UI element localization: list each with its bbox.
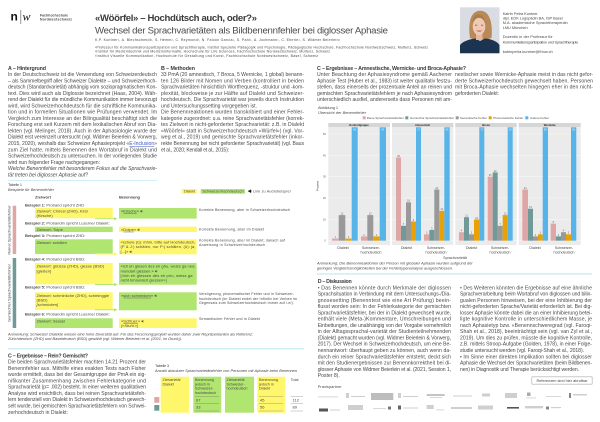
panel D: Diskussion: Sprachverarbeitung beim Wortabruf von diglossen und bilin-	[460, 292, 592, 298]
bar value labels: 10	[475, 217, 479, 220]
panel D: Diskussion: Sprachvarietätsfehler, bei der in Dialekt gewechselt wurde,	[318, 310, 451, 316]
portrait photo	[460, 7, 500, 53]
panel A: Hintergrund: tät treten bei diglosser Aphasie auf?	[8, 172, 88, 178]
panel B: Methoden: rekte Benennung bei nicht geforderter Sprachvarietät) (vgl. Baus	[161, 141, 304, 147]
bar value labels: 4	[461, 230, 463, 233]
presenter contact text: Kommunikationspartizipation und Sprachtherapie	[503, 40, 578, 44]
logo: FHNW	[10, 10, 72, 24]
table legend	[182, 189, 291, 194]
table 3: counts of variety errors: hochdeutsch	[195, 391, 216, 395]
authors and affiliations: ³Institut Visuelle Kommunikation, Hochschule für Gestaltung und Kunst, Fachhochschule Nordwestschweiz, Basel, Schweiz	[95, 54, 318, 58]
panel C top: Amnestische, Wernicke- und Broca-Aphasie	[317, 66, 593, 103]
table legend: Link zu Audiobeispiel	[253, 190, 291, 194]
table 1 note: Zürichdeutsch (ZHD) und Baseldeutsch (BSD) gewählt (vgl. Widmer Beierlein et al. (2021, im Druck)).	[7, 336, 182, 341]
bar value labels: 86	[353, 128, 357, 132]
example 5: Beispiel 5: Proband spricht BSD:	[25, 285, 85, 290]
x axis: Dialekt	[401, 246, 412, 250]
x axis: Schweizer-	[362, 246, 381, 250]
panel D: Diskussion: Einbettungen, die unabhängig von der Vorgabe vornehmlich	[318, 323, 451, 329]
bar value labels: 12	[369, 212, 372, 216]
panel A: Hintergrund: lekten (vgl. Melinger, 2018). Auch in der Aphasiologie wurde der	[8, 128, 157, 134]
example 6: Semantischer Fehler und in Dialekt	[199, 317, 260, 321]
panel B: Methoden: plexität, blockweise je zur Hälfte auf Dialekt und Schweizer-	[161, 91, 304, 97]
panel C top: Amnestische, Wernicke- und Broca-Aphasie: Unter Beachtung der Aphasiesyndrome gemäß Aachener	[317, 72, 452, 78]
y axis	[316, 132, 326, 243]
title: Wechsel der Sprachvarietäten als Bildbenennfehler bei diglosser Aphasie	[95, 26, 388, 36]
panel D: Diskussion: enthält viele (Meta-)Kommentare, Umschreibungen und	[318, 317, 451, 323]
bar value labels: 32	[494, 170, 497, 173]
bar value labels: 2	[363, 234, 365, 237]
panel C bottom: Rein? Gemischt?: Benennfehler aus. Mithilfe eines exakten Tests nach Fisher	[8, 366, 146, 372]
legend: error types: Andere Fehler	[530, 116, 549, 120]
panel C top: Amnestische, Wernicke- und Broca-Aphasie: geforderten Dialekt:	[455, 91, 499, 97]
panel C bottom: Rein? Gemischt?: nifikanter Zusammenhang zwischen Fehlerkategorie und	[8, 378, 146, 384]
panel A: Hintergrund: Vergleich zum Interesse an der Bilingualität beschäftigt sich die	[8, 116, 157, 122]
example 1: «Kirsche» 🔊︎	[121, 209, 143, 214]
panel D: Diskussion: ligte kognitive Kontrolle in unterschiedlichem Masse, je	[460, 317, 592, 323]
panel C bottom: Rein? Gemischt?: Sprachvarietät (p= .002) besteht. In einer weiteren qualitativen	[8, 385, 146, 391]
presenter contact text	[503, 11, 578, 54]
table 3: counts of variety errors: 89	[292, 405, 298, 410]
panel B: Methoden: Sprachvarietäten hinsichtlich Wortfrequenz, -struktur und -kom-	[161, 84, 304, 90]
table 1 column headers: Zielwort	[35, 194, 52, 199]
example 2: Beispiel 2: Probandin spricht Luzerner Dialekt:	[25, 220, 110, 225]
y axis: Prozent	[316, 181, 320, 191]
panel A: Hintergrund: – als Sammelbegriff aller Schweizer Dialekte – und Schweizerhoch-	[8, 78, 157, 84]
panel A: Hintergrund: rend der Dialekt für die mündliche Kommunikation immer bevorzugt	[8, 97, 158, 103]
panel C top: Amnestische, Wernicke- und Broca-Aphasie: C – Ergebnisse – Amnestische, Wernicke- und Broca-Aphasie?	[317, 66, 466, 72]
table 3: counts of variety errors	[154, 377, 303, 413]
example 3: Anweisung in Schweizerhochdeutsch	[199, 243, 265, 247]
panel C bottom: Rein? Gemischt?: Analyse wird ersichtlich, dass bei reinen Sprachvarietätsfeh-	[8, 391, 146, 397]
example 5: «sich schminken» 🔊︎	[121, 293, 157, 298]
bar value labels: 9	[413, 219, 415, 222]
panel C bottom: Rein? Gemischt?: selt wurde, bei gemischten Sprachvarietätsfehlern von Schwei-	[8, 404, 146, 410]
logo: FHNW: n	[10, 10, 18, 24]
panel D: Diskussion: losser Aphasie könnte dabei die an einer Inhibierung betei-	[460, 310, 592, 316]
table 3: counts of variety errors: jedoch in	[194, 382, 210, 386]
example 5	[25, 285, 297, 312]
panel D: Diskussion: nen) in Diagnostik und Therapie berücksichtigt werden.	[460, 367, 579, 373]
category bar: reiner Sprachvarietaetsfehler: Reiner Sprachvarietätsfehler	[6, 205, 11, 255]
panel D: Diskussion: D – Diskussion	[318, 279, 352, 285]
example 4	[25, 256, 197, 286]
chart note	[316, 260, 473, 270]
example 1: Beispiel 1: Proband spricht ZHD	[25, 202, 84, 207]
bars: gray	[339, 190, 566, 241]
panel D: Diskussion: glosser Aphasie von Widmer Beierlein et al. (2021, Session 1,	[318, 367, 451, 373]
bar value labels: 3	[540, 232, 542, 235]
bar value labels: 1	[348, 236, 350, 239]
table 3: counts of variety errors: 56	[260, 405, 265, 410]
y axis: 10	[323, 217, 326, 221]
example 2: «Dolpe» 🔊︎	[121, 227, 140, 232]
table 3: counts of variety errors: 67	[196, 397, 201, 402]
presenter contact text: Katrin Petra Kuntner	[503, 11, 538, 16]
chart caption: Abbildung 1	[318, 105, 338, 110]
table 3 caption	[154, 363, 297, 373]
panel A: Hintergrund: 2015, 2020), weshalb das Schweizer Aphasieprojekt «E-Inclusion»	[8, 141, 157, 147]
legend: error types: Semantische Fehler	[460, 116, 487, 120]
example 5: Zielwort: schminkche (ZHD), schminggie	[36, 293, 110, 298]
chart panels background: Kontrollgruppe	[349, 123, 369, 127]
panel D: Diskussion: flusst worden sein: In der Fehlerkategorie der gemischten	[318, 304, 451, 310]
presenter contact text: M.A. akademische Sprachtherapeutin	[503, 20, 568, 25]
x axis: Dialekt	[529, 246, 541, 250]
panel A: Hintergrund: tion und in formellen Situationen wie Prüfungen verwendet. Im	[8, 110, 157, 116]
bar value labels: 1	[335, 236, 337, 239]
panel D: Diskussion: mit den Studienergebnissen zur Benennkorrektheit bei di-	[318, 361, 451, 367]
example 3: [...]» 🔊︎	[120, 249, 132, 254]
example 3: Korrekte Benennung, aber im Dialekt; danach auf	[199, 238, 285, 242]
panel D: Diskussion: durch ein reiner Sprachvarietätsfehler entsteht, deckt sich	[318, 354, 451, 360]
panel B: Methoden: «Wöörfel» statt in Schweizerhochdeutsch «Würfel») (vgl. Vor-	[161, 128, 304, 134]
example 3	[25, 233, 285, 256]
table 3: counts of variety errors: Benennung	[259, 378, 278, 382]
example 5: [schminken]	[36, 302, 59, 307]
title	[95, 13, 388, 36]
panel C top: Amnestische, Wernicke- und Broca-Aphasie: gemischten Sprachvarietätsfehlern je nach Aphasiesyndrom	[317, 91, 452, 97]
example 4: mundart giessen.» 🔊︎	[120, 268, 158, 273]
panel D: Diskussion: Shah et al., 2018), beeinträchtigt sein (vgl. van Zyl et al.,	[460, 329, 592, 335]
authors and affiliations: K.P. Kuntner¹, A. Blechschmidt¹, S. Hemm², C. Reymond³, N. Falcón García¹, S. Pahl¹, A. Jochmann¹, C. Eberle¹, S. Widmer Beierlein¹	[95, 38, 341, 42]
x axis: hochdeutsch	[490, 250, 510, 254]
x axis: Schweizer-	[555, 246, 574, 250]
panel B: Methoden: kategorie zugeordnet: u.a. reine Sprachvarietätsfehler (korrek-	[161, 116, 304, 122]
practice partner logos	[318, 392, 587, 412]
panel D: Diskussion: Poster 8).	[318, 373, 340, 379]
panel D: Diskussion: • Das Benennen könnte durch Merkmale der diglossen	[318, 285, 451, 291]
logo: FHNW: Nordwestschweiz	[40, 18, 72, 22]
panel A: Hintergrund	[8, 66, 158, 178]
panel A: Hintergrund: zum Ziel hatte, mittels Benennen den Wortabruf in Dialekt und	[8, 147, 157, 153]
panel D: Diskussion: • Des Weiteren könnten die Ergebnisse auf eine ähnliche	[460, 285, 592, 291]
logo: FHNW: w	[22, 10, 31, 24]
x axis: Dialekt	[466, 246, 477, 250]
panel D: Diskussion: z.B. mittels Stroop-Aufgabe (Golden, 1978), in einer Folge-	[460, 342, 592, 348]
panel A: Hintergrund: Forschung erst seit Kurzem mit dem lexikalischen Abruf von Dia-	[8, 122, 157, 128]
example 5: Verzögerung, phonematischer Fehler und in Schweizer-	[199, 292, 295, 296]
example 1	[25, 202, 290, 220]
presenter contact text: katrinpetra.kuntner@fhnw.ch	[503, 49, 553, 54]
chart note: geringen Vergleichsmöglichkeiten bei der Fehlertypenanalyse ausgeschlossen.	[317, 266, 453, 270]
x axis: Dialekt	[337, 246, 349, 250]
bar chart: error types per aphasia group and variety	[316, 123, 581, 260]
example 3: Beispiel 3: Proband spricht ZHD:	[25, 233, 85, 238]
example 4: nicht fehlundert giessen»]	[120, 278, 167, 282]
table 3: counts of variety errors: Benennung	[195, 378, 214, 382]
panel D: Diskussion: (Dialekt) gemacht wurden (vgl. Widmer Beierlein & Vorwerg,	[318, 336, 451, 342]
table legend: Dialekt	[184, 190, 195, 194]
table 3 caption: Tabelle 3	[155, 363, 169, 368]
bar value labels: 27	[417, 128, 420, 132]
y axis: 30	[323, 175, 326, 179]
presenter contact text: Dozentin in der Professur für	[503, 34, 553, 39]
example 2: Zielwort: Tulpe	[36, 227, 64, 232]
panel A: Hintergrund: In der Deutschschweiz ist die Verwendung von Schweizerdeutsch	[8, 72, 157, 78]
panel C bottom: Rein? Gemischt?	[8, 354, 146, 416]
panel B: Methoden: tes Zielwort in nicht-geforderter Sprachvarietät: z.B. in Dialekt	[161, 122, 305, 128]
table 3: counts of variety errors: 45	[260, 397, 265, 402]
x axis: hochdeutsch	[426, 250, 446, 254]
chart panels background: Wernicke	[544, 123, 556, 127]
chart caption	[318, 105, 367, 115]
panel A: Hintergrund: A – Hintergrund	[8, 66, 46, 72]
table 3: counts of variety errors: Zielvarietät	[162, 378, 181, 382]
bar value labels: 3	[568, 232, 570, 235]
panel C bottom: Rein? Gemischt?: lern tendenziell von Dialekt in Schweizerhochdeutsch gewech-	[8, 397, 146, 403]
table 1 note: Anmerkung: Schweizer Dialekte weisen eine hohe Diversität auf. Für das Forschungsprojekt wurden daher zwei Repräsentanten als Referenz:	[7, 331, 253, 336]
panel C top: Amnestische, Wernicke- und Broca-Aphasie: unterschiedlich ausfiel, andererseits dass Personen mit am-	[317, 97, 452, 103]
bar value labels: 30	[489, 174, 492, 177]
panel A: Hintergrund: text. Dies wird auch als Diglossie bezeichnet (Haas, 2004). Wäh-	[8, 91, 157, 97]
panel A: Hintergrund: deutsch (Standardvarietät) abhängig vom soziopragmatischen Kon-	[8, 84, 157, 90]
panel C bottom: Rein? Gemischt?: zerhochdeutsch in Dialekt:	[8, 410, 68, 416]
bar value labels: 3	[471, 232, 473, 235]
table 3 caption: Anzahl absoluter Sprachvarietätsfehler von Personen mit Aphasie beim Benennen	[154, 368, 297, 373]
bar value labels: 2	[535, 234, 537, 237]
x axis: Schweizer-	[491, 246, 510, 250]
bar value labels: 15	[529, 206, 532, 209]
panel C top: Amnestische, Wernicke- und Broca-Aphasie: stellen, dass einerseits der prozentuale Anteil an reinen und	[317, 84, 452, 90]
table 3: counts of variety errors: Total	[291, 378, 299, 382]
bar value labels: 2	[376, 234, 378, 237]
example 6: [«Stuhl.»]	[120, 323, 139, 328]
table caption	[8, 182, 55, 192]
example 5: hochdeutsch (im Dialekt endet der Infinitiv bei Verben im	[199, 297, 297, 301]
panel B: Methoden: Die Benennreaktionen wurden transkribiert und einer Fehler-	[161, 110, 304, 116]
table legend: Schweizerhochdeutsch	[202, 190, 244, 194]
panel C bottom: Rein? Gemischt?: C – Ergebnisse – Rein? Gemischt?	[8, 354, 88, 360]
bar value labels: 83	[572, 128, 576, 132]
table 3: counts of variety errors: Dialekt	[259, 387, 270, 391]
example 5: (BSD)	[36, 297, 48, 302]
example 1: Zielwort: Chriesi (ZHD), Kirsi	[36, 208, 88, 213]
x axis: Schweizer-	[427, 246, 446, 250]
panel C bottom: Rein? Gemischt?: wurde ermittelt, dass bei der Gesamtgruppe der PmA ein sig-	[8, 372, 146, 378]
presenter contact text: LMU München	[503, 25, 528, 30]
bar value labels: 12	[504, 212, 507, 216]
bar value labels: 56	[544, 128, 547, 132]
table caption: Tabelle 1	[8, 182, 22, 187]
bar value labels: 2	[558, 234, 560, 237]
x axis: hochdeutsch	[554, 250, 574, 254]
bar value labels: 12	[341, 212, 344, 216]
panel D: Diskussion: nicht-geforderten Sprache/Varietät erforderlich ist. Bei dig-	[460, 304, 592, 310]
title: «Wöörfel» – Hochdütsch auch, oder?»	[95, 13, 257, 24]
references button	[532, 377, 592, 384]
panel A: Hintergrund: Schweizerhochdeutsch zu untersuchen. In der vorliegenden Studie	[8, 154, 157, 160]
panel B: Methoden: und Untersuchungssetting vorgegeben ist.	[161, 103, 257, 109]
table 3: counts of variety errors: jedoch in	[258, 382, 274, 386]
panel A: Hintergrund: wird nun folgender Frage nachgegangen:	[8, 160, 100, 166]
bar value labels: 72	[480, 128, 484, 132]
legend: error types: Phonematische Fehler	[493, 116, 523, 120]
example 4: [gießen]	[36, 268, 51, 273]
bar value labels	[335, 128, 576, 239]
legend: error types: Reine Sprachvarietätsfehler	[367, 116, 404, 120]
practice partners heading: Praxispartner	[318, 384, 342, 389]
example 4: Beispiel 4: Proband spricht BSD:	[25, 256, 85, 261]
panel D: Diskussion: 2017). Der Wechsel in Schweizerhochdeutsch, um eine Be-	[318, 342, 451, 348]
panel B: Methoden: weg et al., 2019) und gemischte Sprachvarietätsfehler (inkor-	[161, 135, 304, 141]
panel B: Methoden: ten 126 Bilder mit Nomen und Verben (kontrolliert in beiden	[161, 78, 304, 84]
bar value labels: 14	[440, 208, 444, 211]
table 3: counts of variety errors: Schweizer-	[226, 382, 246, 386]
bars: orange	[345, 211, 571, 241]
table 3: counts of variety errors: hochdeutsch	[226, 387, 247, 391]
y axis: 0	[324, 239, 326, 243]
bar value labels: 19	[509, 128, 512, 132]
bar value labels: 7	[500, 223, 502, 226]
y axis: 40	[323, 153, 326, 157]
example 3: Zielwort: schälen	[36, 240, 67, 245]
panel A: Hintergrund: Welche Benennfehler mit besonderem Fokus auf die Sprachvarie-	[8, 166, 157, 172]
table 1 note	[7, 331, 253, 341]
panel C top: Amnestische, Wernicke- und Broca-Aphasie: Aphasie Test (Huber et al., 1983) ist weiter qualitativ festzu-	[317, 78, 452, 84]
table 3: counts of variety errors: Schweizer-	[195, 387, 214, 391]
panel D: Diskussion: gnosesetting (Benenntest wie eine Art Prüfung) beein-	[318, 298, 451, 304]
bar value labels: 5	[431, 227, 433, 230]
panel B: Methoden: B – Methoden	[161, 66, 195, 72]
table 1 column headers	[35, 194, 141, 199]
panel B: Methoden: 33 PmA (20 amnestisch, 7 Broca, 5 Wernicke, 1 global) benann-	[161, 72, 304, 78]
example 3: «schele (ü): mhm, bitte auf Hochdeutsch,	[120, 240, 196, 245]
table 3: counts of variety errors: 112	[292, 397, 300, 402]
category bar: reiner Sprachvarietaetsfehler	[6, 205, 16, 255]
bars: teal	[401, 172, 561, 241]
panel D: Diskussion: in der Alltagssprachal-varietät der Studienteilnehmenden	[318, 329, 451, 335]
panel D: Diskussion: nennantwort: überhaupt geben zu können, auch wenn da-	[318, 348, 451, 354]
table 1 column headers: Benennung	[119, 194, 141, 199]
chart panels background: Broca	[482, 123, 490, 127]
panel A: Hintergrund: wird, wird Schweizerhochdeutsch für die schriftliche Kommunika-	[8, 103, 157, 109]
bars: blue	[352, 127, 576, 241]
category bar: gemischter Sprachvarietaetsfehler: Gemischter Sprachvarietätsfehler	[6, 263, 11, 322]
category bar: gemischter Sprachvarietaetsfehler	[6, 258, 16, 328]
example 6	[25, 312, 260, 328]
chart caption: Übersicht der Benennfehler	[318, 110, 367, 115]
bar value labels: 7	[403, 223, 405, 226]
table 3: counts of variety errors: Zielvarietät	[226, 378, 245, 382]
panel D: Diskussion: Aphasie die Wechsel der Sprachvarietäten (beim Bildbenen-	[460, 361, 592, 367]
panel A: Hintergrund: Dialekt erst vereinzelt untersucht (vgl. Widmer Beierlein & Vorwerg,	[8, 135, 157, 141]
example 6: Beispiel 6: Probandin spricht Luzerner Dialekt:	[25, 312, 110, 317]
logo: FHNW: Fachhochschule	[40, 13, 68, 17]
bar value labels: 54	[446, 128, 449, 132]
bar value labels: 24	[524, 187, 527, 190]
references button: Referenzen sind hier abrufbar	[536, 378, 588, 383]
bar value labels: 3	[426, 232, 428, 235]
chart panels background: Amnestisch	[415, 123, 431, 127]
panel D: Diskussion: studie untersucht werden (vgl. Faroqi-Shah et al., 2018).	[460, 348, 584, 354]
panel D: Diskussion: Sprachsituation in Verbindung mit dem Untersuchungs-/Dia-	[318, 292, 451, 298]
table 3: counts of variety errors: 33	[196, 405, 201, 410]
panel B: Methoden	[161, 66, 305, 153]
table caption: Beispiele für Benennfehler	[8, 187, 55, 192]
example 4: Zielwort: güüsse (ZHD), giesse (BSD)	[36, 264, 105, 269]
panel D: Diskussion: • Im Sinne einer direkten Implikation sollten bei diglosser	[460, 354, 592, 360]
panel D: Diskussion: nach Aphasietyp bzw. «Benennschweregrad (vgl. Faroqi-	[460, 323, 592, 329]
panel C top: Amnestische, Wernicke- und Broca-Aphasie: derte Schweizerhochdeutsch gewechselt haben. Personen	[455, 78, 593, 84]
bar value labels: 84	[381, 128, 385, 132]
authors and affiliations	[95, 38, 428, 58]
example 1: Korrekte Benennung, aber in Schweizerhochdeutsch	[199, 208, 290, 212]
bar value labels: 18	[407, 200, 410, 203]
example 4: «ich eh giesen des eh ghu, weiss ga ned,	[120, 264, 196, 269]
legend: error types	[363, 116, 549, 120]
example 3: (P & J:) schälen, nur P:) schälen, (ü): ja,	[120, 244, 196, 249]
y axis: 20	[323, 196, 326, 200]
panel B: Methoden: et al., 2020; Kendall et al., 2015):	[161, 147, 229, 153]
example 1: (Kirsche)	[36, 213, 53, 218]
bar value labels: 4	[563, 230, 565, 233]
panel D: Diskussion: gualen Personen hinweisen, bei der eine Inhibierung der	[460, 298, 592, 304]
panel D: Diskussion	[318, 279, 592, 379]
panel C bottom: Rein? Gemischt?: Die beiden Sprachvarietätsfehler machten 14.21 Prozent der	[8, 360, 146, 366]
panel B: Methoden: hochdeutsch. Die Sprachvarietät war jeweils durch Instruktion	[161, 97, 304, 103]
chart note: Anmerkung: Die Benennreaktionen der Person mit globaler Aphasie wurden aufgrund der	[316, 260, 473, 266]
authors and affiliations: ²Institut für Medizintechnik und Medizininformatik, Hochschule für Life Sciences, Fachhochschule Nordwestschweiz, Muttenz, Schweiz	[95, 50, 330, 54]
example 6: Zielwort: Sessel	[36, 319, 65, 324]
panel C top: Amnestische, Wernicke- und Broca-Aphasie: nestischer sowie Wernicke-Aphasie meist in das nicht gefor-	[455, 72, 593, 78]
panel D: Diskussion: 2019). Um dies zu prüfen, müsste die kognitive Kontrolle,	[460, 336, 592, 342]
bar value labels: 8	[553, 221, 555, 224]
y axis: 50	[323, 132, 326, 136]
chart panels background	[328, 123, 581, 245]
presenter contact text: dipl. EDK Logopädin BA, ISP Basel	[503, 16, 563, 21]
divider under A	[8, 179, 157, 182]
x axis: Sprachvarietät	[443, 256, 467, 260]
legend: error types: Gemischte Sprachvarietätsfehler	[410, 116, 454, 120]
example 2	[25, 220, 264, 232]
panel C top: Amnestische, Wernicke- und Broca-Aphasie: mit Broca-Aphasie wechselten hingegen eher in den nicht-	[455, 84, 593, 90]
bar value labels: 11	[465, 215, 468, 218]
example 4: [«ich eh giessen des eh phu, weiss ga	[120, 273, 193, 278]
table 3: counts of variety errors: Dialekt	[162, 382, 174, 386]
example 6: «Schtuel.» 🔊︎	[121, 319, 144, 324]
bar value labels: 24	[435, 187, 439, 190]
example 5: Gegensatz zum Schweizerhochdeutsch immer auf /-e/).	[199, 301, 294, 305]
x axis	[337, 246, 574, 260]
x axis: hochdeutsch	[361, 250, 381, 254]
bar value labels: 39	[397, 155, 400, 158]
authors and affiliations: ¹Professur für Kommunikationspartizipation und Sprachtherapie, Institut Spezielle Pädagogik und Psychologie, Pädagogische Hochschule, Fachhochschule Nordwestschweiz, Muttenz, Schweiz	[95, 45, 428, 49]
bars: pink	[332, 158, 556, 241]
example 2: Korrekte Benennung, aber im Dialekt	[199, 227, 264, 231]
